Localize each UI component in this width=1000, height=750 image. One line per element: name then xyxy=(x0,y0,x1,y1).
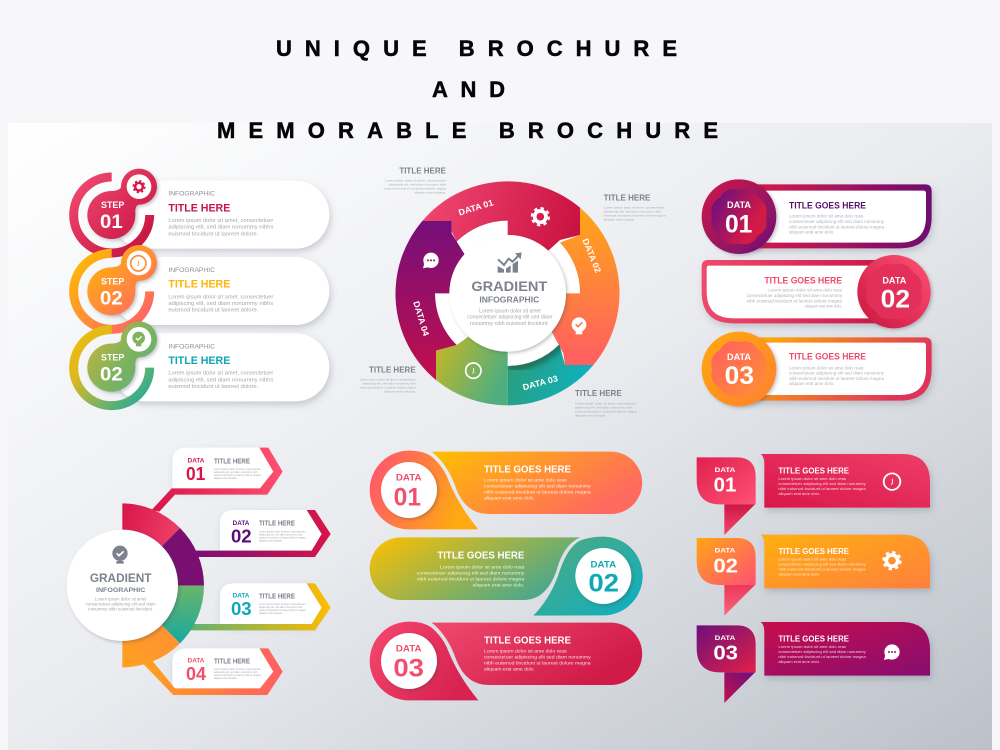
step 2 card: Lorem ipsum dolor sit amet, consectetuer xyxy=(168,294,274,300)
banner 02: DATA xyxy=(590,559,617,569)
data card 01: nibh euismod tincidunt ut laoreet dolore magna xyxy=(789,224,884,229)
callout: bottom right: adipiscing elit, sed diam nonummy nibh xyxy=(575,405,633,409)
arrow 03: 03 xyxy=(231,598,252,619)
banner 01: TITLE GOES HERE xyxy=(484,464,572,475)
callout: top right xyxy=(604,192,666,221)
banner 01: 01 xyxy=(394,484,421,512)
callout: bottom left: aliquam erat volutpat. xyxy=(384,389,416,393)
step 1 card: STEP xyxy=(101,200,124,210)
tag row 02: 02 xyxy=(713,555,738,577)
data card 03: TITLE GOES HERE xyxy=(789,352,866,362)
arrow 03: aliquam erat volutpat. xyxy=(259,611,283,615)
step 3 card: INFOGRAPHIC xyxy=(168,343,215,350)
data card 03: Lorem ipsum dolor sit ame dolo reas xyxy=(789,365,864,370)
tag row 03: aliquam erat ame dolo. xyxy=(778,659,820,664)
callout: bottom right: Lorem ipsum dolor sit amet, consectetuer xyxy=(575,401,636,405)
banner 01 xyxy=(370,451,642,529)
callout: top left: Lorem ipsum dolor sit amet, consectetuer xyxy=(385,179,446,183)
title: UNIQUE BROCHURE xyxy=(276,36,677,61)
panel: data cards top right xyxy=(702,179,932,406)
tag row 01: consectetuer adipiscing elit sed diam nonummy xyxy=(778,481,866,486)
center text: nonummy nibh euismod tincidunt. xyxy=(470,321,549,327)
step 3 card: 02 xyxy=(100,365,123,386)
step 1 card xyxy=(74,169,329,253)
tag row 02: TITLE GOES HERE xyxy=(778,547,850,556)
arrow 01: aliquam erat volutpat. xyxy=(214,476,238,480)
center text xyxy=(467,278,553,327)
banner 02 xyxy=(370,537,643,616)
banner 01: DATA xyxy=(396,473,422,483)
data card 02: TITLE GOES HERE xyxy=(764,275,842,285)
center text: GRADIENT xyxy=(90,571,152,585)
banner 03: nibh euismod tincidunt ut laoreet dolore magna xyxy=(484,661,591,667)
arrow 03: Lorem ipsum dolor sit amet, consectetuer xyxy=(259,602,306,606)
panel: teardrop banners xyxy=(370,451,643,700)
arrow 04 xyxy=(143,648,283,695)
callout: top right: adipiscing elit, sed diam nonummy nibh xyxy=(604,209,661,213)
callout: bottom left: euismod tincidunt ut laoreet dolore magna xyxy=(360,385,416,389)
arrow 04: adipiscing elit, sed diam nonummy nibh xyxy=(214,670,258,674)
arrow 04: euismod tincidunt ut laoreet dolore magna xyxy=(214,673,261,677)
banner 03: aliquam erat ame dolo. xyxy=(484,667,535,673)
segment labels: DATA 04 xyxy=(411,300,431,337)
data card 02: Lorem ipsum dolor sit ame dolo reas xyxy=(768,288,843,293)
tag row 02: nibh euismod tincidunt ut laoreet dolore magna xyxy=(778,567,866,572)
step 3 card: Lorem ipsum dolor sit amet, consectetuer xyxy=(168,371,274,377)
step 2 card: STEP xyxy=(101,276,124,286)
segment shadow xyxy=(508,344,561,367)
data card 02: consectetuer adipiscing elit sed diam nonummy xyxy=(747,293,843,298)
banner 01: consectetuer adipiscing elit sed diam nonummy xyxy=(484,484,591,490)
segment: green xyxy=(436,337,508,405)
panel: tag banners bottom right xyxy=(697,454,930,703)
callout: top left: euismod tincidunt ut laoreet dolore magna xyxy=(384,186,446,190)
icon: bulb xyxy=(112,546,128,564)
tag row 03: Lorem ipsum dolor sit ame dolo reas xyxy=(778,644,846,649)
data card 01: DATA xyxy=(727,200,752,210)
banner 01: aliquam erat ame dolo. xyxy=(484,496,535,502)
step 2 card: adipiscing elit, sed diam nonummy nibhs xyxy=(168,301,274,307)
banner 02: TITLE GOES HERE xyxy=(437,550,525,561)
step 3 card xyxy=(74,321,329,406)
arrow 02: aliquam erat volutpat. xyxy=(259,538,283,542)
tag row 01: DATA xyxy=(715,467,736,474)
tag row 03: TITLE GOES HERE xyxy=(778,634,850,643)
callout: bottom left: Lorem ipsum dolor sit amet, consectetuer xyxy=(360,377,416,381)
callout: top left: aliquam erat volutpat. xyxy=(415,190,446,194)
data card 02: aliquam erat ame dolo. xyxy=(805,304,842,309)
step 2 card: euismod tincidunt ut laoreet dolore. xyxy=(168,308,258,314)
segment: data 04 xyxy=(395,221,465,380)
tag row 01: 01 xyxy=(714,475,736,497)
arrow 03: TITLE HERE xyxy=(259,593,295,600)
arrow 03: DATA xyxy=(233,593,250,600)
step 1 card: adipiscing elit, sed diam nonummy nibhs xyxy=(168,225,274,231)
segment: data 01 xyxy=(422,181,580,251)
panel: step list xyxy=(74,169,329,406)
step 2 card xyxy=(74,245,329,329)
tag row 03: consectetuer adipiscing elit sed diam nonummy xyxy=(778,649,866,654)
callout: top right: Lorem ipsum dolor sit amet, consectetuer xyxy=(604,205,665,209)
ring base xyxy=(408,193,608,393)
arrow 02 xyxy=(193,510,331,557)
data card 03: 03 xyxy=(725,362,754,390)
arrow 02: adipiscing elit, sed diam nonummy nibh xyxy=(259,532,303,536)
callout: bottom left: adipiscing elit, sed diam nonummy nibh xyxy=(362,381,416,385)
center text: GRADIENT xyxy=(471,278,548,294)
arrow 01: euismod tincidunt ut laoreet dolore magna xyxy=(214,473,261,477)
tag row 02: consectetuer adipiscing elit sed diam nonummy xyxy=(778,562,866,567)
arrow 01: Lorem ipsum dolor sit amet, consectetuer xyxy=(214,467,261,471)
data card 02: 02 xyxy=(881,285,910,313)
arrow 02: DATA xyxy=(233,520,250,527)
title: MEMORABLE BROCHURE xyxy=(217,118,718,143)
tag row 02: Lorem ipsum dolor sit ame dolo reas xyxy=(778,557,846,562)
data card 01: Lorem ipsum dolor sit ame dolo reas xyxy=(789,214,864,219)
arrow 01: DATA xyxy=(188,458,205,465)
tag row 01: aliquam erat ame dolo. xyxy=(778,491,820,496)
callout: top right: TITLE HERE xyxy=(604,192,651,202)
arrow 01: adipiscing elit, sed diam nonummy nibh xyxy=(214,470,258,474)
callout: bottom left: TITLE HERE xyxy=(369,364,416,374)
step 1 card: 01 xyxy=(100,212,123,233)
data card 01: aliquam erat ame dolo. xyxy=(789,229,834,234)
center text: INFOGRAPHIC xyxy=(479,296,540,305)
callout: bottom left xyxy=(360,364,416,393)
tag row 02: aliquam erat ame dolo. xyxy=(778,572,820,577)
step 3 card: euismod tincidunt ut laoreet dolore. xyxy=(168,384,258,390)
half ring chart xyxy=(122,503,204,667)
banner 02: aliquam erat ame dolo. xyxy=(473,583,524,589)
step 2 card: 02 xyxy=(100,288,123,309)
step 3 card: adipiscing elit, sed diam nonummy nibhs xyxy=(168,377,274,383)
data card 01: TITLE GOES HERE xyxy=(789,201,866,211)
segment labels: DATA 03 xyxy=(522,373,559,392)
banner 01: Lorem ipsum dolor sit ame dolo reas xyxy=(484,478,567,484)
center text xyxy=(86,571,156,611)
arrow 03: euismod tincidunt ut laoreet dolore magna xyxy=(259,608,306,612)
icon: clock xyxy=(466,363,481,378)
step 2 card: INFOGRAPHIC xyxy=(168,267,215,274)
data card 03: nibh euismod tincidunt ut laoreet dolore magna xyxy=(789,376,884,381)
data card 01 xyxy=(702,179,932,254)
segment: data 03 xyxy=(508,344,593,405)
banner 03: DATA xyxy=(396,644,422,654)
icon: chat xyxy=(423,253,439,268)
arrow 04: 04 xyxy=(186,663,207,684)
step 1 card: Lorem ipsum dolor sit amet, consectetuer xyxy=(168,218,274,224)
banner 03: TITLE GOES HERE xyxy=(484,635,572,646)
step 1 card: euismod tincidunt ut laoreet dolore. xyxy=(168,231,258,237)
center text: Lorem ipsum dolor sit amet xyxy=(95,596,147,601)
tag row 03 xyxy=(697,622,930,703)
banner 02: nibh euismod tincidunt ut laoreet dolore magna xyxy=(417,576,525,582)
title xyxy=(217,36,718,143)
arrow 02: Lorem ipsum dolor sit amet, consectetuer xyxy=(259,529,306,533)
tag row 03: DATA xyxy=(715,635,736,642)
arrow 04: TITLE HERE xyxy=(214,658,250,665)
banner 03: consectetuer adipiscing elit sed diam nonummy xyxy=(484,655,591,661)
panel: circular gradient infographic xyxy=(360,166,666,418)
arrow 03: adipiscing elit, sed diam nonummy nibh xyxy=(259,605,303,609)
data card 02: DATA xyxy=(882,275,907,285)
data card 01: 01 xyxy=(725,210,752,238)
center disc xyxy=(67,530,178,641)
banner 03 xyxy=(370,622,642,700)
arrow 03 xyxy=(188,583,331,630)
tag row 02 xyxy=(697,535,930,616)
step 2 card: TITLE HERE xyxy=(168,279,231,291)
step 3 card: STEP xyxy=(101,353,124,363)
step 3 card: TITLE HERE xyxy=(168,355,231,367)
callout: bottom right: TITLE HERE xyxy=(575,388,622,398)
banner 03: Lorem ipsum dolor sit ame dolo reas xyxy=(484,649,567,655)
tag row 01: nibh euismod tincidunt ut laoreet dolore magna xyxy=(778,486,866,491)
banner 01: nibh euismod tincidunt ut laoreet dolore magna xyxy=(484,490,591,496)
banner 02: Lorem ipsum dolor sit ame dolo reas xyxy=(440,564,525,570)
segment: data 02 xyxy=(552,208,620,365)
arrow 01: TITLE HERE xyxy=(214,458,250,465)
data card 03: consectetuer adipiscing elit sed diam nonummy xyxy=(789,371,885,376)
step 1 card: INFOGRAPHIC xyxy=(168,191,215,198)
center text: consectetuer adipiscing elit sed diam xyxy=(467,315,553,321)
data card 02 xyxy=(702,255,931,328)
callout: top left: adipiscing elit, sed diam nonummy nibh xyxy=(389,182,446,186)
arrow 02: 02 xyxy=(231,525,252,546)
callout: bottom right xyxy=(575,388,637,418)
icon: growth chart xyxy=(498,252,522,273)
center text: INFOGRAPHIC xyxy=(96,587,146,594)
callout: top right: aliquam erat volutpat. xyxy=(604,217,635,221)
callout: bottom right: aliquam erat volutpat. xyxy=(575,414,607,418)
center text: consectetuer adipiscing elit sed diam xyxy=(86,601,156,606)
data card 03: aliquam erat ame dolo. xyxy=(789,381,834,386)
arrow 04: Lorem ipsum dolor sit amet, consectetuer xyxy=(214,667,261,671)
banner 03: 03 xyxy=(393,655,424,683)
icon: bulb xyxy=(572,317,586,334)
data card 02: nibh euismod tincidunt ut laoreet dolore magna xyxy=(747,298,842,303)
icon: gear xyxy=(532,208,549,225)
segment labels: DATA 01 xyxy=(457,197,495,218)
center text: nonummy nibh euismod tincidunt. xyxy=(88,606,153,611)
tag row 01 xyxy=(697,454,930,535)
panel: radial arrows bottom left xyxy=(67,448,331,695)
callout: top left: TITLE HERE xyxy=(399,166,446,176)
data card 03: DATA xyxy=(727,352,752,362)
arrow 04: aliquam erat volutpat. xyxy=(214,676,238,680)
tag row 01: TITLE GOES HERE xyxy=(778,466,850,475)
callout: bottom right: euismod tincidunt ut laoreet dolore magna xyxy=(575,409,637,413)
tag row 03: nibh euismod tincidunt ut laoreet dolore magna xyxy=(778,654,866,659)
center text: Lorem ipsum dolor sit amet xyxy=(479,308,541,314)
arrow 02: TITLE HERE xyxy=(259,521,295,528)
arrow 04: DATA xyxy=(188,658,205,665)
banner 02: 02 xyxy=(588,570,619,598)
banner 02: consectetuer adipiscing elit sed diam nonummy xyxy=(417,570,525,576)
segment labels: DATA 02 xyxy=(580,237,603,274)
arrow 01: 01 xyxy=(186,463,205,484)
data card 03 xyxy=(702,332,932,406)
segment labels xyxy=(411,197,603,392)
title: AND xyxy=(432,77,505,102)
tag row 02: DATA xyxy=(715,548,736,555)
center disc xyxy=(449,235,566,352)
arrow 01 xyxy=(152,448,283,512)
step 1 card: TITLE HERE xyxy=(168,202,231,214)
callout: top right: euismod tincidunt ut laoreet dolore magna xyxy=(604,213,666,217)
data card 01: consectetuer adipiscing elit sed diam nonummy xyxy=(789,219,885,224)
callout: top left xyxy=(384,166,446,194)
arrow 02: euismod tincidunt ut laoreet dolore magna xyxy=(259,535,306,539)
tag row 03: 03 xyxy=(713,643,738,665)
tag row 01: Lorem ipsum dolor sit ame dolo reas xyxy=(778,476,846,481)
